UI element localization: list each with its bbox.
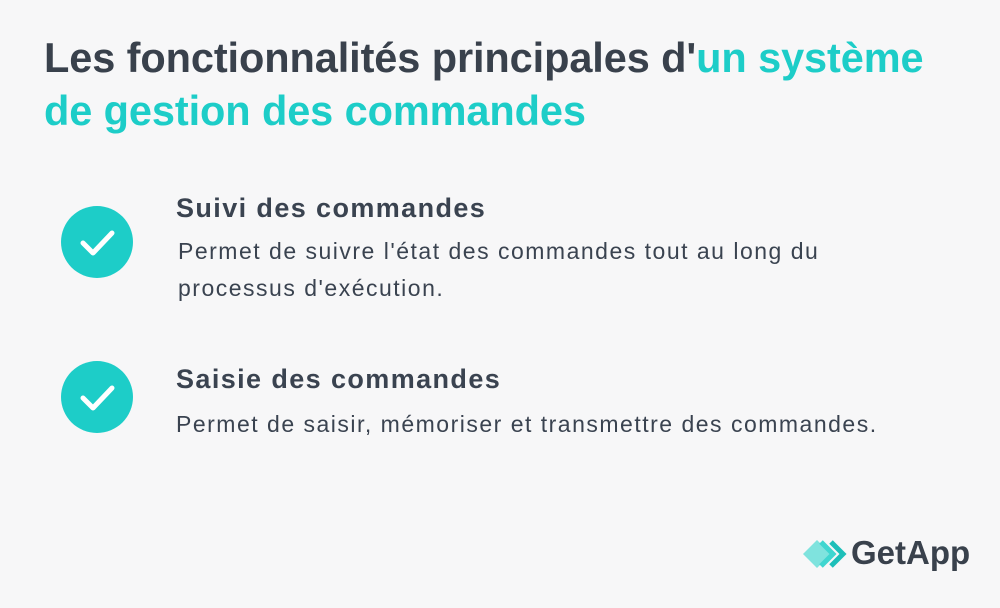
text 1: processus d'exécution.: [178, 275, 444, 301]
heading 1: Suivi des commandes: [176, 193, 486, 223]
text 1: [178, 238, 819, 301]
icon: check 2: [61, 361, 133, 433]
icon: check 1: [61, 206, 133, 278]
title: [44, 34, 924, 134]
title: de gestion des commandes: [44, 87, 586, 134]
heading 2: Saisie des commandes: [176, 364, 501, 394]
logo: GetApp: [851, 534, 970, 571]
text 1: Permet de suivre l'état des commandes tout au long du: [178, 238, 819, 264]
title: Les fonctionnalités principales d'un système: [44, 34, 924, 81]
text 2: Permet de saisir, mémoriser et transmettre des commandes.: [176, 411, 878, 437]
